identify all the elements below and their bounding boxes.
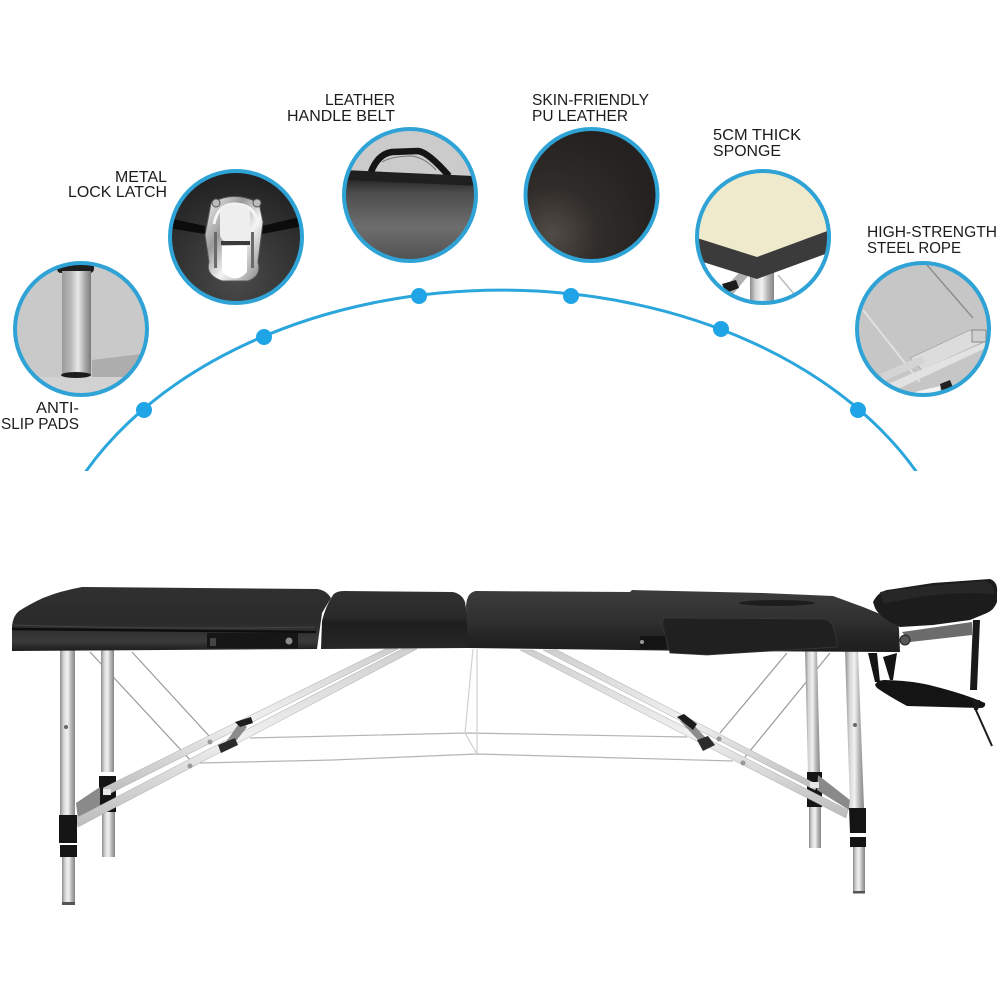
feature: anti-slip pads photo circle (10, 260, 152, 400)
blue feature arc with dots (80, 288, 922, 480)
label: leather handle belt (287, 92, 395, 125)
label: skin-friendly PU leather: PU LEATHER (532, 108, 628, 125)
label: metal lock latch: LOCK LATCH (68, 184, 167, 201)
head rest and straps (868, 579, 997, 746)
label: 5cm thick sponge: SPONGE (713, 143, 781, 160)
left front leg (59, 650, 77, 905)
label: high-strength steel rope (867, 224, 997, 257)
label: anti-slip pads (1, 400, 79, 433)
label: metal lock latch (68, 169, 167, 201)
label: high-strength steel rope: HIGH-STRENGTH (867, 224, 997, 241)
label: leather handle belt: HANDLE BELT (287, 108, 395, 125)
label: anti-slip pads: ANTI- (36, 400, 79, 417)
arm rest (663, 618, 837, 655)
feature: skin-friendly PU leather photo circle (526, 129, 658, 261)
label: leather handle belt: LEATHER (325, 92, 395, 109)
feature: high-strength steel rope photo circle (855, 261, 991, 400)
label: skin-friendly PU leather (532, 92, 649, 125)
right folding braces (520, 650, 850, 818)
feature: leather handle belt photo circle (340, 125, 480, 266)
label: 5cm thick sponge (713, 127, 801, 160)
label: anti-slip pads: SLIP PADS (1, 416, 79, 433)
label: metal lock latch: METAL (115, 169, 167, 186)
feature: 5cm thick sponge photo circle (695, 169, 831, 308)
left folding braces (76, 649, 417, 827)
label: high-strength steel rope: STEEL ROPE (867, 240, 961, 257)
carry handle and latch (207, 633, 298, 648)
label: skin-friendly PU leather: SKIN-FRIENDLY (532, 92, 649, 109)
right table section (466, 590, 900, 655)
far-side legs (99, 650, 822, 857)
steel ropes and cables (90, 649, 830, 763)
feature: metal lock latch photo circle (165, 165, 307, 307)
side handle hinge (640, 636, 666, 649)
massage table (12, 579, 997, 905)
left table section (12, 587, 331, 651)
middle table section (321, 591, 468, 649)
label: 5cm thick sponge: 5CM THICK (713, 127, 801, 144)
right front leg (845, 650, 866, 894)
